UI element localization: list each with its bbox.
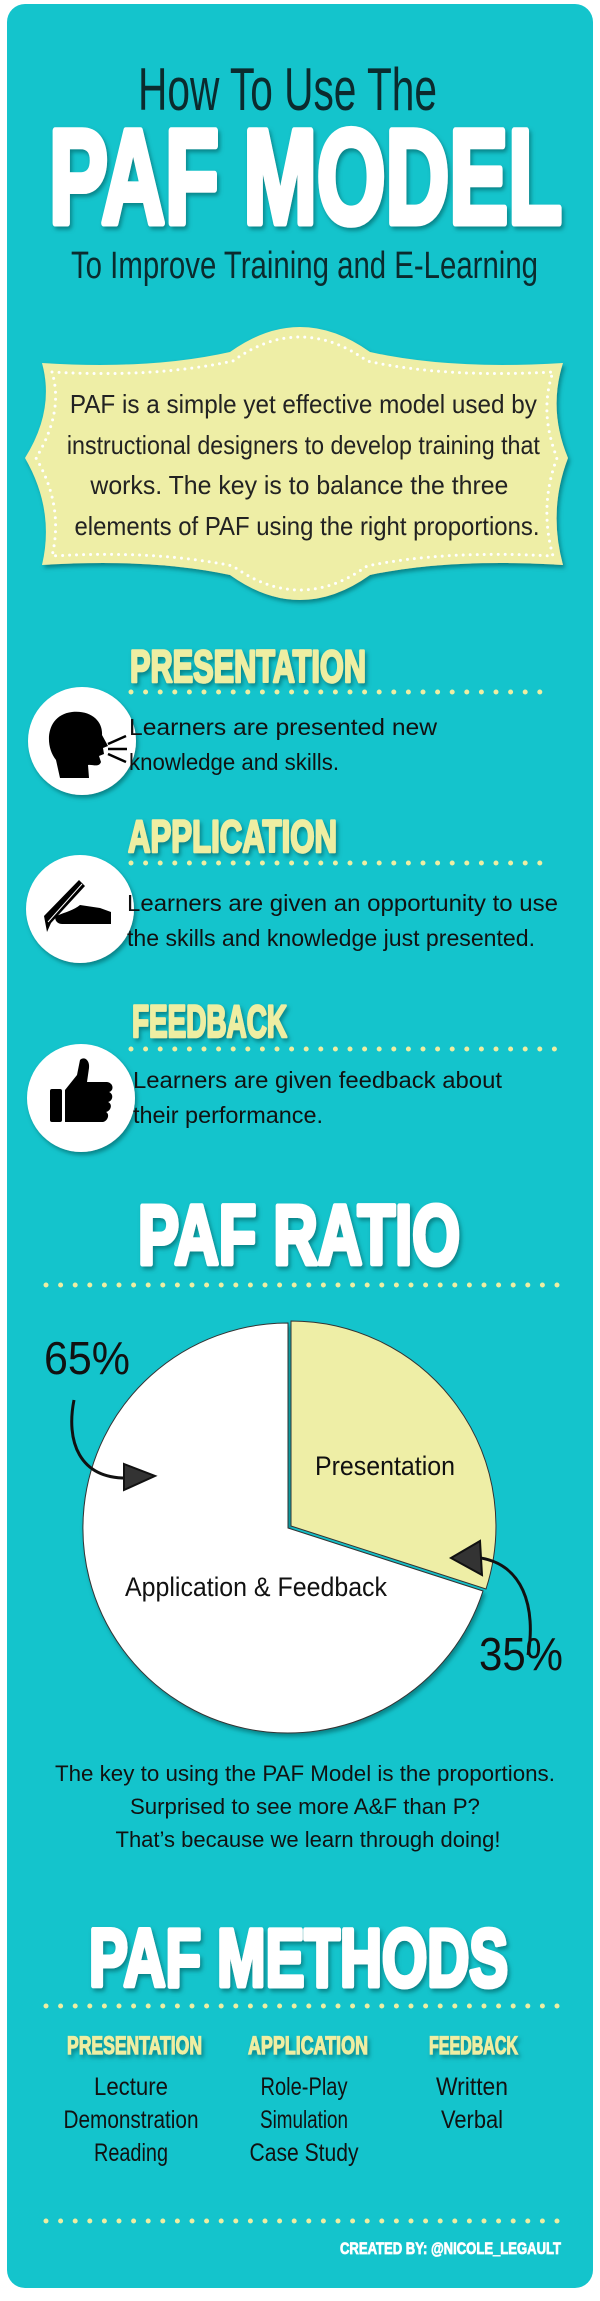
section: presentation [28,641,554,795]
caption: ratio explanation: That’s because we learn through doing! [116,1827,500,1852]
pie chart [83,1321,496,1733]
column: presentation methods: Reading [94,2139,168,2167]
caption: ratio explanation: Surprised to see more A&F than P? [130,1794,480,1819]
banner: intro: works. The key is to balance the three [89,470,508,500]
callout: 35% [451,1541,563,1680]
column: feedback methods: Written [436,2073,508,2101]
column: application methods: Role-Play [260,2073,348,2101]
icon: thumbs up [27,1044,135,1152]
column: application methods: Case Study [250,2139,359,2167]
column: presentation methods: Lecture [94,2073,168,2101]
column: presentation methods: PRESENTATION [67,2032,202,2060]
heading: PAF RATIO: PAF RATIO [138,1188,460,1282]
text: presentation description: Learners are presented new [129,714,437,740]
column: feedback methods: FEEDBACK [429,2032,518,2060]
column: feedback methods: Verbal [441,2106,503,2134]
section: application [26,811,558,963]
banner: intro: elements of PAF using the right proportions. [74,511,540,541]
caption: ratio explanation: The key to using the PAF Model is the proportions. [55,1761,555,1786]
callout: 65% [44,1332,155,1490]
text: feedback description: Learners are given feedback about [133,1067,503,1093]
section: feedback [27,996,556,1152]
column: application methods: Simulation [260,2106,348,2134]
column: presentation methods [64,2032,202,2167]
text: application description: Learners are given an opportunity to use [127,890,558,916]
methods table [64,2032,518,2167]
banner: intro [25,327,568,600]
icon: speaking head [28,687,136,795]
column: application methods: APPLICATION [248,2032,368,2060]
banner: intro: instructional designers to develop training that [67,430,541,460]
text: presentation description: knowledge and skills. [129,749,339,775]
text: application description: the skills and knowledge just presented. [127,925,535,951]
column: feedback methods [429,2032,518,2134]
column: presentation methods: Demonstration [64,2106,198,2134]
heading: APPLICATION: APPLICATION [128,811,337,862]
column: application methods [248,2032,368,2167]
label: Presentation: Presentation [315,1451,455,1481]
heading: FEEDBACK: FEEDBACK [132,996,287,1047]
callout: 65%: 65% [44,1332,130,1384]
label: Application & Feedback: Application & Feedback [125,1572,387,1602]
icon: hand writing [26,855,134,963]
heading: PRESENTATION: PRESENTATION [130,641,366,692]
title: How To Use The: How To Use The [138,56,437,123]
text: feedback description: their performance. [133,1102,323,1128]
callout: 35%: 35% [479,1628,563,1680]
banner: intro: PAF is a simple yet effective model used by [70,389,537,419]
